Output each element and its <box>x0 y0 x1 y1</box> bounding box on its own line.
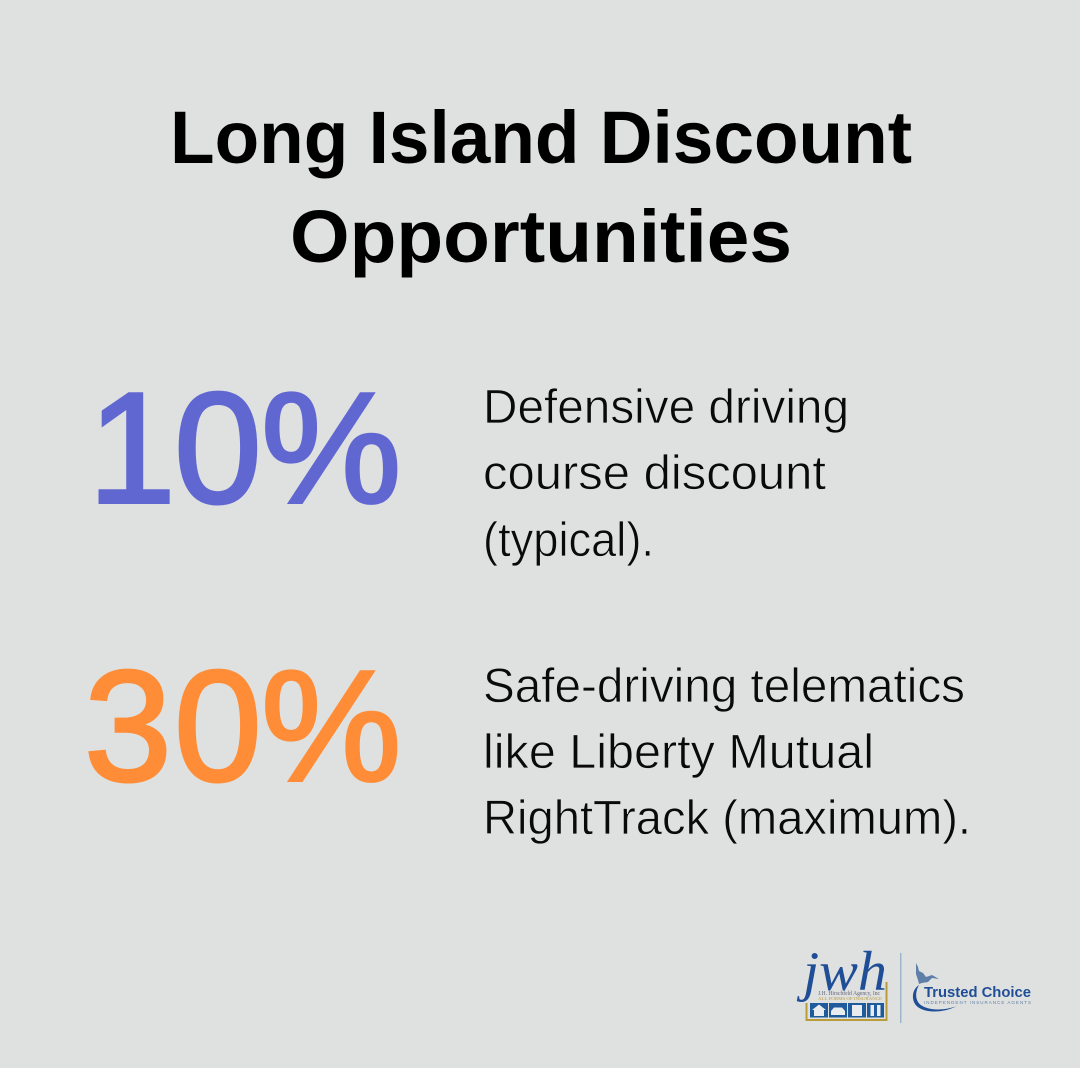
stat: 10%: 10% <box>88 360 402 536</box>
description: defensive driving: course discount <box>483 447 826 500</box>
Trusted Choice wordmark: Trusted Choice <box>924 985 1031 1001</box>
logo icon tiles <box>810 1003 884 1018</box>
logo agency name: J.H. Hirschfeld Agency, Inc <box>818 990 880 997</box>
title: Long Island Discount <box>170 96 912 179</box>
description: telematics: Safe-driving telematics <box>483 660 965 713</box>
title: Opportunities <box>290 195 792 278</box>
Trusted Choice tagline: INDEPENDENT INSURANCE AGENTS <box>924 1000 1031 1005</box>
title <box>170 96 912 278</box>
icon: eagle <box>916 963 939 984</box>
logo icon glyphs <box>812 1004 880 1016</box>
description: defensive driving: (typical). <box>483 514 654 567</box>
logo gold box <box>806 982 886 1020</box>
logo tagline: ALL FORMS OF INSURANCE <box>818 996 882 1001</box>
description: telematics: RightTrack (maximum). <box>483 792 971 845</box>
logo divider <box>900 953 902 1023</box>
description: telematics: like Liberty Mutual <box>483 726 874 779</box>
stat: 30%: 30% <box>84 638 402 814</box>
logo: JWH agency <box>797 941 887 1020</box>
description: defensive driving: Defensive driving <box>483 381 849 434</box>
logo: Trusted Choice <box>913 963 1031 1012</box>
description: defensive driving <box>483 381 849 567</box>
description: telematics <box>483 660 971 845</box>
logo script letters: jwh <box>797 941 887 1003</box>
icon: swoosh <box>913 985 957 1012</box>
